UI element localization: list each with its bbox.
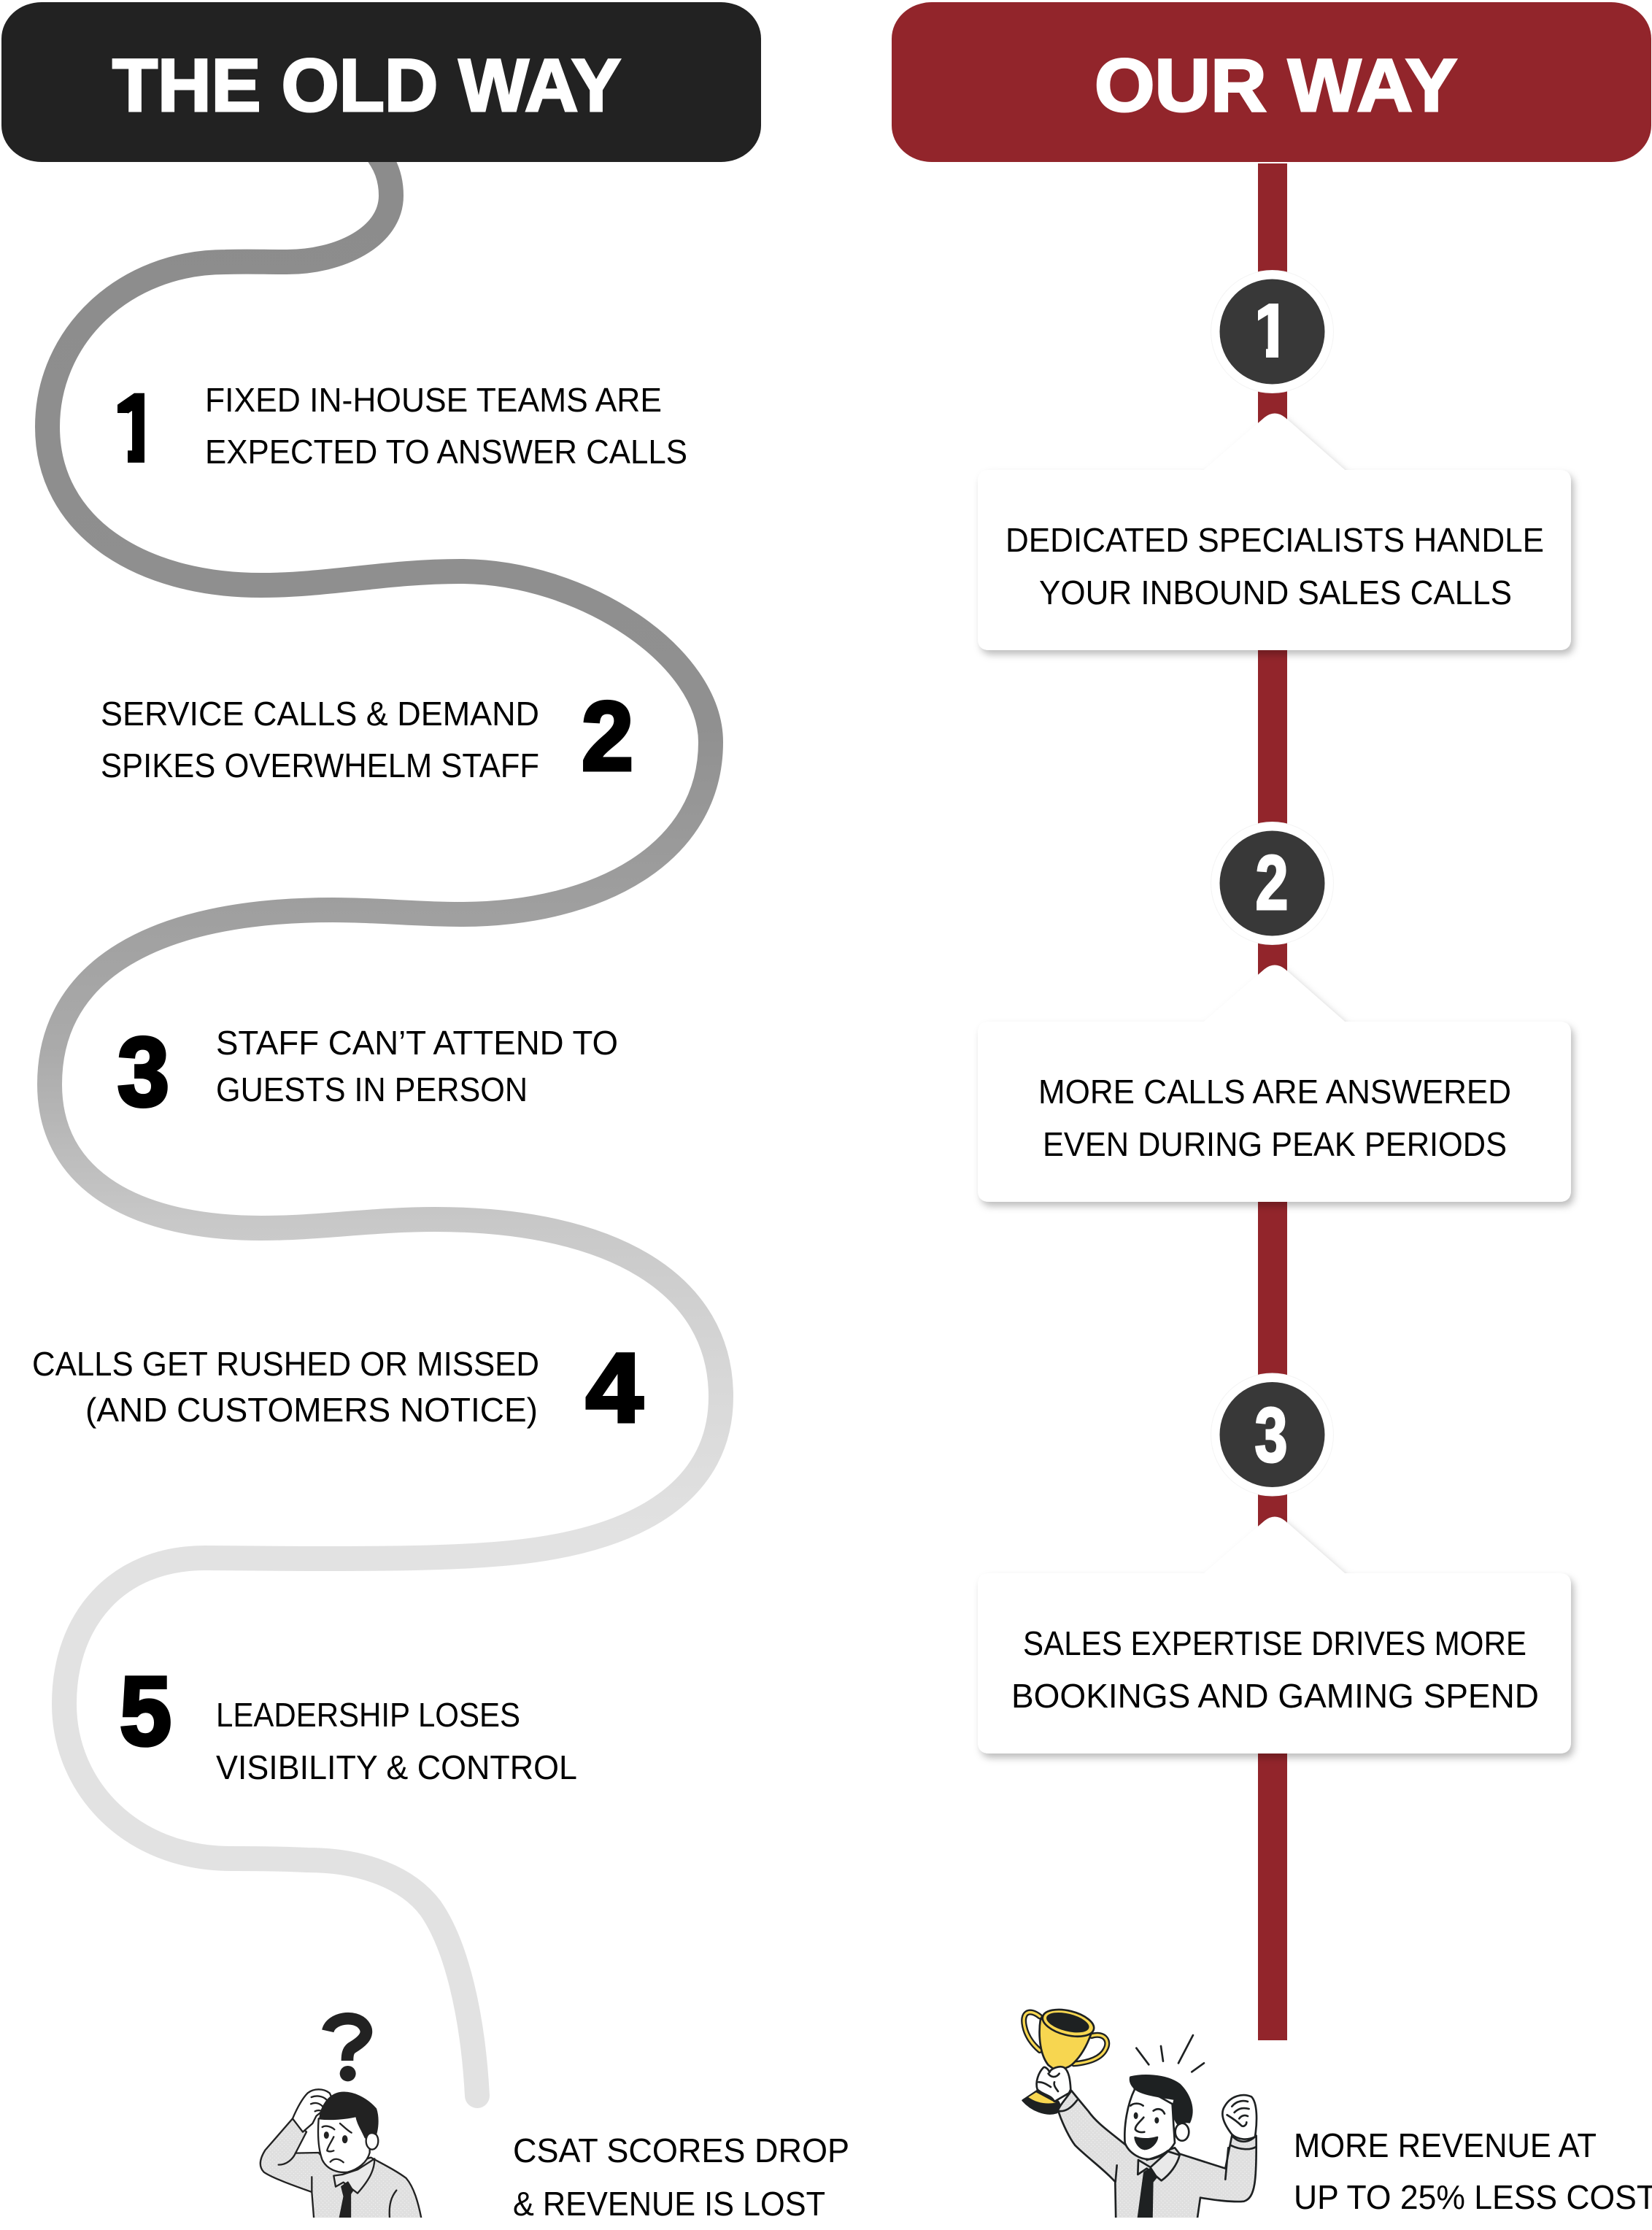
icon: confused man with question mark bbox=[260, 2018, 422, 2223]
header: our way bbox=[892, 2, 1651, 162]
step 4: old way bbox=[32, 1334, 643, 1443]
card 3: SALES EXPERTISE DRIVES MORE bbox=[1023, 1624, 1526, 1662]
badge 2 bbox=[1211, 822, 1334, 944]
step 2: old way: SPIKES OVERWHELM STAFF bbox=[101, 746, 539, 784]
step 1: old way: 1 bbox=[112, 375, 163, 484]
step 4: old way: (AND CUSTOMERS NOTICE) bbox=[85, 1391, 538, 1429]
timeline bar: our way bbox=[1258, 163, 1287, 2040]
card 2 bbox=[978, 965, 1571, 1202]
step 2: old way: SERVICE CALLS & DEMAND bbox=[101, 695, 539, 733]
step 4: old way: 4 bbox=[586, 1334, 643, 1443]
header: the old way bbox=[1, 2, 761, 162]
step 5: old way: VISIBILITY & CONTROL bbox=[216, 1748, 577, 1786]
card 3: BOOKINGS AND GAMING SPEND bbox=[1011, 1677, 1539, 1715]
badge 3: 3 bbox=[1255, 1392, 1287, 1478]
step 3: old way: STAFF CAN’T ATTEND TO bbox=[216, 1024, 618, 1062]
badge 1: 1 bbox=[1251, 288, 1294, 374]
step 3: old way bbox=[117, 1018, 618, 1127]
card 1 bbox=[978, 413, 1571, 650]
card 1: YOUR INBOUND SALES CALLS bbox=[1039, 574, 1512, 611]
outcome text: old way bbox=[513, 2131, 849, 2223]
header: our way: OUR WAY bbox=[1095, 44, 1457, 127]
step 1: old way: EXPECTED TO ANSWER CALLS bbox=[205, 433, 687, 471]
step 4: old way: CALLS GET RUSHED OR MISSED bbox=[32, 1345, 539, 1383]
step 5: old way bbox=[120, 1657, 577, 1786]
step 2: old way: 2 bbox=[582, 682, 633, 791]
header: the old way: THE OLD WAY bbox=[112, 44, 621, 127]
step 5: old way: 5 bbox=[120, 1657, 171, 1766]
step 1: old way: FIXED IN-HOUSE TEAMS ARE bbox=[205, 381, 662, 419]
outcome text: old way: & REVENUE IS LOST bbox=[513, 2185, 825, 2223]
winding path: old way bbox=[47, 157, 721, 2096]
step 3: old way: 3 bbox=[117, 1018, 169, 1127]
step 5: old way: LEADERSHIP LOSES bbox=[216, 1696, 520, 1734]
outcome text: our way: MORE REVENUE AT bbox=[1294, 2126, 1597, 2164]
step 1: old way bbox=[117, 388, 686, 464]
icon: happy man holding trophy bbox=[1023, 2005, 1257, 2223]
card 1: DEDICATED SPECIALISTS HANDLE bbox=[1006, 521, 1544, 559]
outcome text: old way: CSAT SCORES DROP bbox=[513, 2131, 849, 2169]
card 3 bbox=[978, 1516, 1571, 1753]
card 2: EVEN DURING PEAK PERIODS bbox=[1043, 1125, 1507, 1163]
badge 3 bbox=[1211, 1373, 1334, 1496]
card 2: MORE CALLS ARE ANSWERED bbox=[1038, 1073, 1511, 1111]
badge 2: 2 bbox=[1255, 840, 1289, 926]
step 3: old way: GUESTS IN PERSON bbox=[216, 1070, 528, 1108]
step 2: old way bbox=[101, 682, 633, 791]
outcome text: our way bbox=[1294, 2126, 1652, 2216]
badge 1 bbox=[1211, 270, 1334, 393]
